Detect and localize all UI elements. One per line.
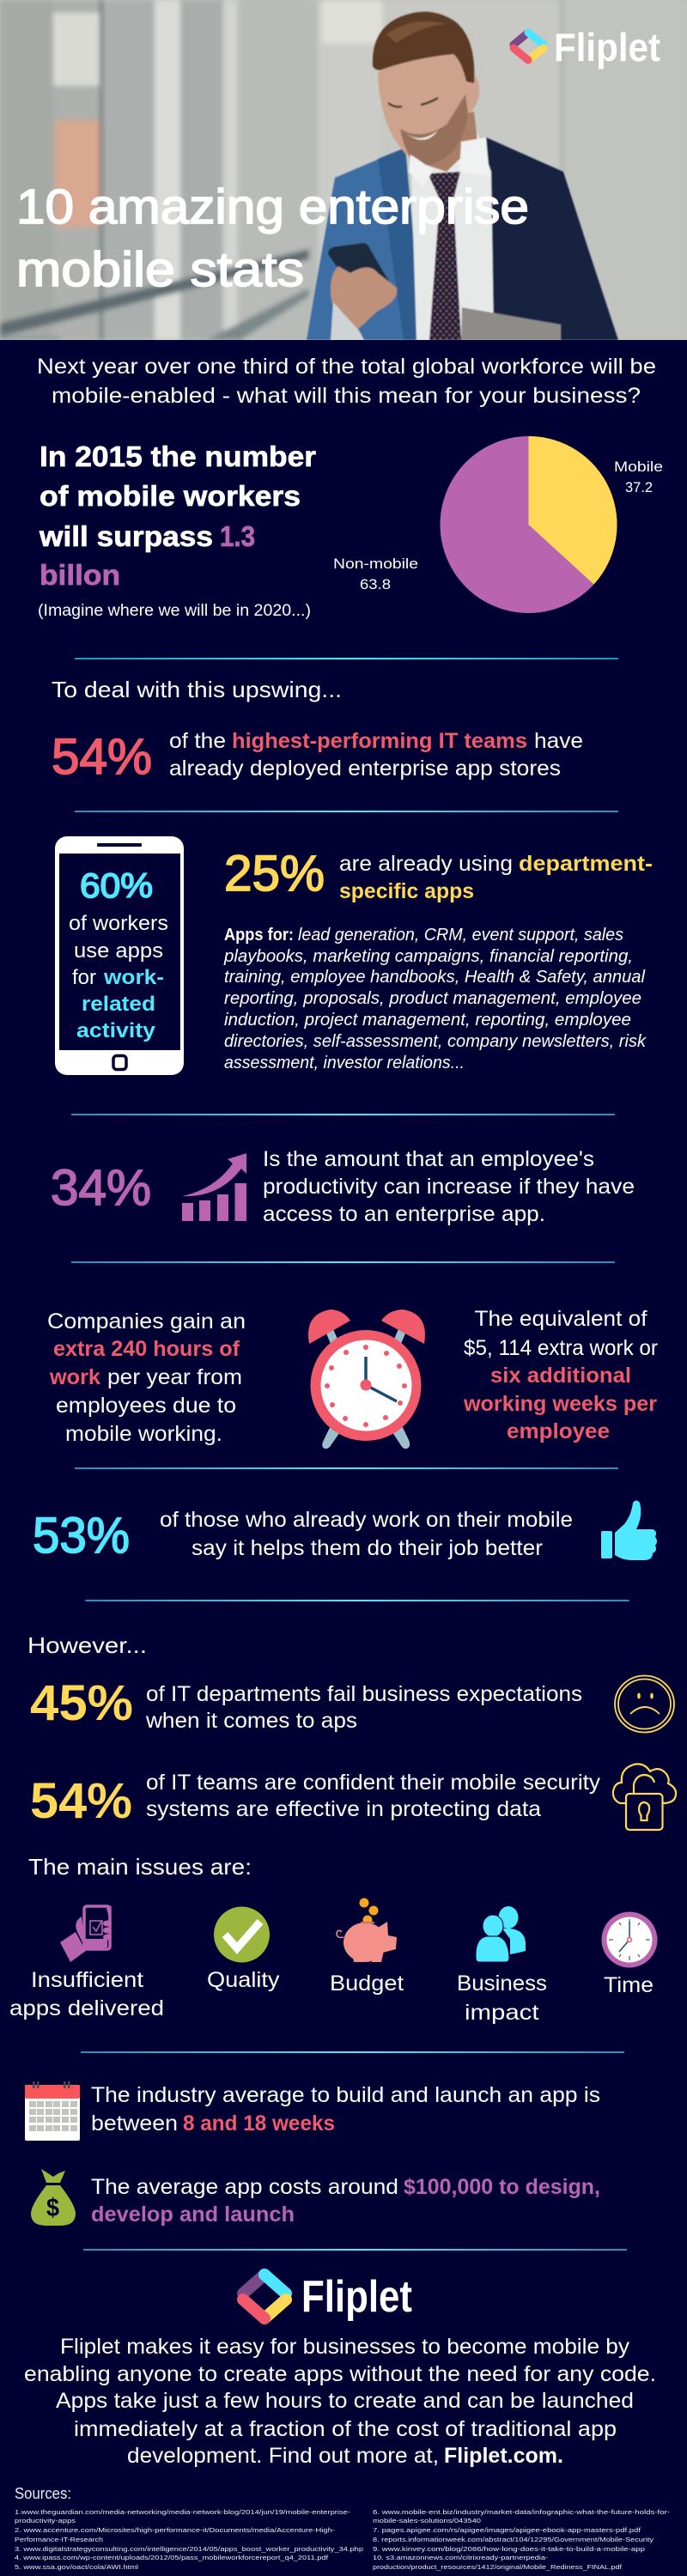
shirt [410, 133, 494, 340]
pie chart: mobile vs non-mobile: Mobile [614, 459, 663, 475]
stat: 34% productivity [51, 1147, 635, 1226]
pie chart: mobile vs non-mobile: 63.8 [360, 576, 391, 592]
stat: 54% app stores: have [534, 729, 583, 753]
stat: 54% mobile security [30, 1764, 676, 1830]
pie chart: mobile vs non-mobile: 37.2 [625, 479, 653, 495]
stat: 34% productivity: productivity can increase if they have [263, 1175, 635, 1199]
icon: sad face [615, 1676, 674, 1733]
text block: six additional weeks: The equivalent of [474, 1307, 647, 1331]
phone panel: 60% of workers: related [82, 993, 155, 1016]
text block: about Fliplet: Fliplet makes it easy for businesses to become mobile by [60, 2335, 630, 2359]
hair [373, 12, 474, 83]
heading: mobile workers stat: (Imagine where we will be in 2020...) [38, 602, 311, 620]
title: 10 amazing enterprise [16, 179, 529, 234]
dark jacket [485, 137, 619, 340]
icon: alarm clock [308, 1309, 425, 1449]
stat: 45% fail expectations [30, 1675, 674, 1733]
stat: 54% app stores [52, 729, 583, 785]
icon: hand holding phone [60, 1906, 112, 1962]
sources: Performance-IT-Research [15, 2536, 103, 2543]
issue: business impact [457, 1906, 547, 2025]
text block: extra 240 hours: per year from [107, 1365, 242, 1389]
subheading: To deal with this upswing... [52, 677, 342, 702]
cuff [331, 302, 364, 340]
phone [327, 242, 390, 282]
text block: six additional weeks [463, 1307, 658, 1443]
issue: time [601, 1911, 658, 1997]
stat: 54% app stores: 54% [52, 729, 152, 785]
stat: 45% fail expectations: 45% [30, 1675, 133, 1731]
icon: rising bar chart with arrow [182, 1153, 246, 1221]
sources: 9. www.kinvey.com/blog/2086/how-long-does-it-take-to-build-a-mobile-app [373, 2545, 645, 2553]
logo mark [243, 2275, 286, 2318]
tie [428, 172, 461, 340]
sources: 4. www.ipass.com/wp-content/uploads/2012/05/pass_mobileworkforcereport_q4_2011.pdf [15, 2554, 329, 2561]
sources: mobile-sales-solutions/043540 [373, 2517, 481, 2524]
text block: extra 240 hours: employees due to [56, 1394, 236, 1418]
stat: 45% fail expectations: of IT departments fail business expectations [146, 1682, 582, 1706]
stat: 45% fail expectations: when it comes to aps [145, 1709, 357, 1733]
text block: extra 240 hours [47, 1309, 246, 1446]
text block: apps for list: directories, self-assessment, company newsletters, risk [224, 1032, 647, 1051]
text block: about Fliplet [24, 2335, 656, 2468]
heading: mobile workers stat: of mobile workers [40, 480, 301, 512]
heading: sources: Sources: [15, 2485, 71, 2502]
issue: business impact: Business [457, 1971, 547, 1996]
sources [15, 2485, 671, 2571]
text block: apps for list: training, employee handbooks, Health & Safety, annual [224, 968, 646, 987]
icon: cloud lock [613, 1764, 676, 1830]
sources: 3. www.digitalstrategyconsulting.com/intelligence/2014/05/apps_boost_worker_productivity_34.php [15, 2545, 363, 2553]
issue: business impact: impact [465, 2001, 539, 2025]
icon: thumbs up [601, 1501, 657, 1560]
text block: six additional weeks: $5, 114 extra work or [464, 1336, 658, 1360]
phone panel: 60% of workers: work- [103, 966, 164, 989]
issue: insufficient apps delivered [9, 1906, 164, 2020]
face [378, 53, 479, 165]
logo: Fliplet header [514, 25, 660, 70]
text block: extra 240 hours: mobile working. [65, 1422, 222, 1446]
stat: 54% app stores: already deployed enterprise app stores [169, 756, 561, 781]
stat: 25% department-specific apps: department- [519, 852, 653, 876]
issue: budget: Budget [330, 1971, 404, 1996]
phone panel: 60% of workers: of workers [69, 912, 168, 935]
phone panel: 60% of workers [55, 836, 184, 1075]
sources: 5. www.ssa.gov/oact/cola/AWI.html [15, 2563, 138, 2571]
text block: about Fliplet: development. Find out more at, [127, 2444, 439, 2468]
text block: apps for list [223, 926, 647, 1072]
stat: 53% job better [33, 1501, 657, 1564]
text block: extra 240 hours: extra 240 hours of [53, 1337, 240, 1361]
stat: time to build an app [25, 2081, 600, 2141]
stat: 34% productivity: Is the amount that an employee's [263, 1147, 594, 1171]
issue: insufficient apps delivered: apps delivered [9, 1996, 164, 2020]
stat: 54% mobile security: systems are effective in protecting data [146, 1797, 541, 1821]
stat: time to build an app: between [91, 2111, 178, 2136]
phone panel: 60% of workers: 60% [80, 867, 153, 905]
issue: quality [207, 1906, 280, 1992]
text block: six additional weeks: employee [507, 1419, 610, 1443]
beard [400, 94, 468, 165]
subheading: However... [27, 1632, 147, 1658]
icon: money bag [31, 2169, 76, 2226]
heading: mobile workers stat: In 2015 the number [40, 440, 316, 472]
stat: 25% department-specific apps: specific apps [339, 879, 474, 903]
sources: 6. www.mobile-ent.biz/industry/market-data/infographic-what-the-future-holds-for- [373, 2508, 671, 2516]
stat: 25% department-specific apps [224, 846, 653, 903]
stat: 54% mobile security: of IT teams are confident their mobile security [146, 1771, 601, 1795]
text block: apps for list: lead generation, CRM, event support, sales [298, 926, 623, 945]
stat: 34% productivity: 34% [51, 1160, 151, 1216]
text block: about Fliplet: Apps take just a few hours to create and can be launched [56, 2389, 634, 2413]
intro text: Next year over one third of the total global workforce will be [37, 355, 656, 379]
stat: average app cost: The average app costs around [91, 2175, 398, 2199]
sources: 10. s3.amazonnews.com/citrixready-partnerpedia- [373, 2554, 549, 2561]
icon: wall clock [601, 1911, 658, 1968]
issue: insufficient apps delivered: Insufficient [31, 1968, 143, 1992]
phone panel: 60% of workers: for [72, 966, 96, 989]
text block: apps for list: induction, project management, reporting, employee [224, 1011, 631, 1030]
heading: mobile workers stat: will surpass [39, 520, 213, 552]
folder [461, 307, 561, 340]
logo mark [514, 33, 544, 60]
heading: mobile workers stat [38, 440, 316, 620]
stat: 53% job better: of those who already work on their mobile [160, 1508, 573, 1532]
collar [459, 137, 489, 176]
issue: budget [330, 1898, 404, 1996]
sources: production/product_resources/1412/original/Mobile_Rediness_FINAL.pdf [373, 2563, 623, 2571]
text block: extra 240 hours: Companies gain an [47, 1309, 246, 1334]
text block: six additional weeks: six additional [490, 1364, 631, 1388]
eyes, smile [388, 98, 438, 106]
text block: about Fliplet: enabling anyone to create apps without the need for any code. [24, 2362, 656, 2386]
stat: 34% productivity: access to an enterprise app. [263, 1202, 545, 1226]
subheading: The main issues are: [28, 1854, 252, 1880]
text block: extra 240 hours: work [49, 1365, 100, 1389]
stat: 25% department-specific apps: 25% [224, 846, 325, 902]
logo: Fliplet header: Fliplet [554, 25, 660, 70]
phone panel: 60% of workers: use apps [74, 939, 163, 963]
text block: six additional weeks: working weeks per [463, 1392, 657, 1416]
text block: about Fliplet: immediately at a fraction of the cost of traditional app [74, 2417, 617, 2441]
title [16, 179, 529, 297]
sources: 8. reports.informationweek.com/abstract/104/12295/Government/Mobile-Security [373, 2536, 654, 2543]
text block: about Fliplet: Fliplet.com. [444, 2444, 563, 2468]
text block: apps for list: playbooks, marketing campaigns, financial reporting, [223, 947, 633, 966]
issue: quality: Quality [207, 1968, 280, 1992]
icon: calendar [25, 2081, 80, 2141]
icon: people [476, 1906, 526, 1962]
stat: 54% mobile security: 54% [30, 1773, 132, 1829]
logo: Fliplet footer [243, 2272, 412, 2322]
heading: mobile workers stat: billon [40, 559, 120, 591]
pie chart: mobile vs non-mobile [333, 436, 663, 613]
neck [428, 112, 477, 173]
text block: apps for list: reporting, proposals, product management, employee [224, 989, 641, 1008]
text block: apps for list: Apps for: [224, 926, 294, 945]
heading: mobile workers stat: 1.3 [220, 520, 255, 552]
intro text [37, 355, 656, 408]
stat: average app cost [31, 2169, 600, 2227]
title: mobile stats [16, 242, 304, 297]
intro text: mobile-enabled - what will this mean for your business? [52, 384, 641, 408]
icon: check mark [214, 1906, 270, 1963]
stat: 53% job better: say it helps them do their job better [192, 1536, 543, 1560]
stat: average app cost: $100,000 to design, [404, 2175, 600, 2199]
stat: average app cost: develop and launch [91, 2202, 295, 2227]
pie chart: mobile vs non-mobile: Non-mobile [333, 556, 418, 572]
sources: 1.www.theguardian.com/media-networking/media-network-blog/2014/jun/19/mobile-enterprise- [15, 2508, 351, 2516]
icon: money bag: $ [46, 2194, 59, 2222]
stat: 53% job better: 53% [33, 1508, 130, 1564]
stat: time to build an app: The industry average to build and launch an app is [91, 2083, 600, 2107]
icon: piggy bank [337, 1898, 397, 1962]
text block: apps for list: assessment, investor relations... [224, 1054, 465, 1072]
stat: 25% department-specific apps: are already using [339, 852, 513, 876]
blue jacket [306, 159, 404, 340]
sources: productivity-apps [15, 2517, 76, 2524]
logo: Fliplet footer: Fliplet [301, 2272, 412, 2322]
hand [331, 266, 397, 331]
hero photo: businessman looking at phone [0, 0, 687, 340]
sources: 7. pages.apigee.com/rs/apigee/images/apigee-ebook-app-masters-pdf.pdf [373, 2526, 641, 2534]
issue: time: Time [604, 1973, 654, 1997]
stat: 54% app stores: of the [169, 729, 226, 753]
stat: 54% app stores: highest-performing IT teams [232, 729, 527, 753]
stat: time to build an app: 8 and 18 weeks [183, 2111, 335, 2136]
phone panel: 60% of workers: activity [76, 1019, 156, 1042]
sources: 2. www.accenture.com/Microsites/high-performance-it/Documents/media/Accenture-High- [15, 2526, 336, 2534]
